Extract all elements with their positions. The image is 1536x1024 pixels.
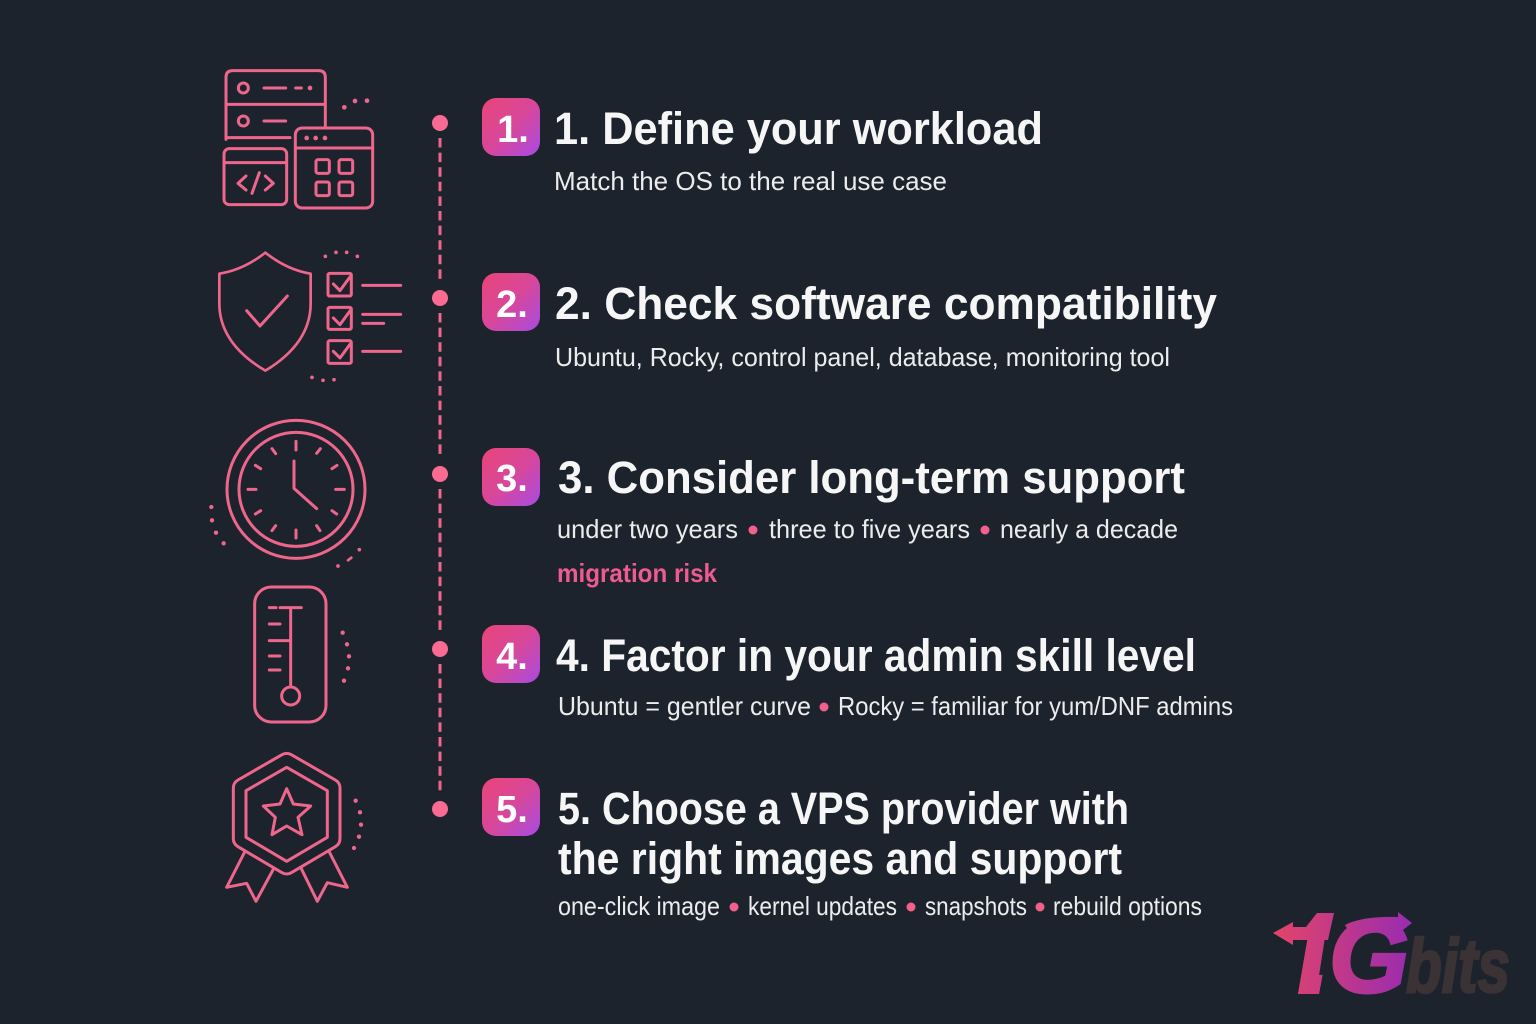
heading 5 [558,783,1129,884]
badge 2 [482,273,540,331]
support durations: nearly a decade [1000,514,1178,544]
logo: 1Gbits: G [1329,899,1409,1015]
skill comparison [558,691,1233,721]
badge 5: 5. [496,789,528,831]
provider features: one-click image [558,891,720,921]
heading 5: 5. Choose a VPS provider with [558,783,1129,834]
badge 5 [482,778,540,836]
support durations: under two years [557,514,738,544]
skill comparison: Rocky = familiar for yum/DNF admins [838,691,1233,721]
migration risk note: migration risk [557,558,717,588]
skill comparison: Ubuntu = gentler curve [558,691,811,721]
provider features: snapshots [925,891,1027,921]
provider features: rebuild options [1053,891,1202,921]
badge 1 [482,98,540,156]
badge 3 [482,448,540,506]
support durations: three to five years [769,514,970,544]
step 4 [482,625,1233,721]
logo: 1Gbits: 1 [1281,889,1333,1019]
icon: clock [209,420,365,568]
support durations [557,514,1178,544]
icon: award badge with star [227,753,363,901]
step 1 [482,98,1043,196]
badge 1: 1. [497,109,529,151]
badge 4: 4. [496,636,528,678]
timeline [432,115,448,817]
provider features: kernel updates [748,891,897,921]
description 2: Ubuntu, Rocky, control panel, database, monitoring tool [555,342,1170,372]
icon: thermometer gauge [255,587,351,722]
heading 4: 4. Factor in your admin skill level [556,630,1196,681]
logo: 1Gbits [1273,912,1509,994]
icon: shield and checklist [219,250,401,382]
provider features [558,891,1202,921]
icon: servers and app windows [224,71,373,208]
heading 2: 2. Check software compatibility [555,278,1217,329]
badge 2: 2. [496,284,528,326]
step 5 [482,778,1202,921]
badge 4 [482,625,540,683]
heading 1: 1. Define your workload [554,103,1043,154]
badge 3: 3. [496,458,528,500]
heading 5: the right images and support [558,833,1122,884]
description 1: Match the OS to the real use case [554,166,947,196]
heading 3: 3. Consider long-term support [558,452,1185,503]
step 2 [482,273,1217,372]
step 3 [482,448,1185,588]
